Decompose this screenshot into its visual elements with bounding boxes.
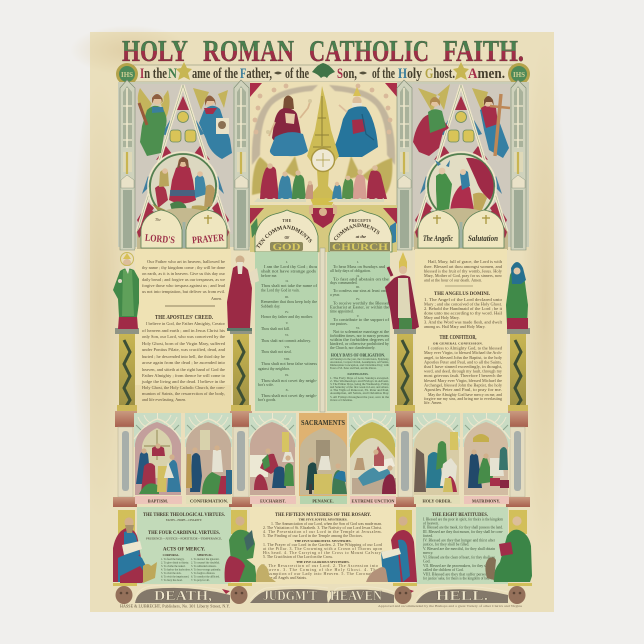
Lord's Prayer text: Our Father who art in heaven, hallowed be: [147, 259, 225, 265]
masks: [116, 586, 526, 604]
creed text: only Son, our Lord, who was conceived by the: [142, 334, 225, 340]
Angelus text: among us. Hail Mary and Holy Mary.: [424, 324, 486, 329]
Hail Mary text: [424, 259, 503, 282]
heading: Salutation: Salutation: [468, 234, 498, 243]
commandments list: VI.: [285, 333, 289, 337]
precepts list: Octave of Christmas.: [330, 399, 353, 402]
precepts list: Ascension, Corpus Christi, Assumption, All Saints,: [330, 361, 389, 364]
Angelus text: 2. Behold the Handmaid of the Lord ; be it: [424, 306, 503, 311]
precepts list: time appointed.: [330, 310, 354, 314]
statue: pope: [385, 252, 419, 329]
precepts list: a year.: [330, 293, 340, 297]
evangelist: St Luke with ox: [366, 510, 417, 582]
Angelus text: 3. And the Word was made flesh, and dwelt: [424, 320, 503, 326]
commandments list: Thou shalt not covet thy neigh-: [261, 379, 318, 383]
mercy lists: 5. To forgive offences.: [191, 572, 216, 575]
beatitudes list: [422, 518, 504, 582]
precepts list: 3. The Ember Days, being the Wednesday, Friday: [330, 383, 390, 386]
band text: [140, 66, 505, 82]
mercy lists: 2. To counsel the doubtful.: [191, 562, 220, 564]
label: death: DEATH,: [154, 589, 212, 604]
precepts list: VI.: [356, 326, 360, 330]
Hail Mary text: blessed is the fruit of thy womb, Jesus. Holy: [424, 268, 503, 274]
beatitudes list: III. Blessed are they that mourn, for they shall be com-: [423, 530, 504, 535]
precepts list: the Church, nor clandestinely.: [330, 346, 375, 351]
commandments list: [258, 260, 318, 402]
mercy lists: 1. To instruct the ignorant.: [191, 558, 220, 561]
precepts list: all holy days of obligation.: [330, 269, 371, 273]
sacraments heading: SACRAMENTS: [301, 418, 345, 427]
panel: Lord's Prayer and Apostles' Creed: [135, 249, 231, 413]
creed text: judge the living and the dead. I believe in the: [141, 379, 225, 384]
gold spiral columns: [115, 328, 530, 411]
heading: Prayer: PRAYER: [192, 233, 225, 246]
beatitudes list: VI. Blessed are the clean of heart, for they shall see: [423, 556, 495, 560]
beatitudes list: God.: [423, 560, 431, 564]
Hail Mary text: thee. Blessed art thou amongst women, and: [424, 264, 502, 270]
arches: Angelus Salutation: [414, 208, 508, 250]
precepts list: Not to solemnize marriage at the: [333, 330, 389, 334]
title: FAITH.: [443, 33, 524, 68]
precepts list: FASTING DAYS.: [348, 373, 369, 376]
commandments list: Thou shalt not steal.: [261, 350, 292, 354]
precepts list: All Sundays in the year, the Circumcision, Epiphany,: [330, 358, 389, 361]
triangle frame: [137, 85, 229, 232]
band text: of the: [285, 66, 309, 82]
precepts list: and Saturday of the first week in Lent, and others.: [330, 386, 389, 389]
sacrament labels: EUCHARIST.: [260, 498, 286, 504]
statue: bishop: [113, 252, 139, 329]
heading: Apostles' Creed: THE APOSTLES' CREED.: [155, 315, 213, 321]
panel: virtues and acts of mercy: SPIRITUAL.: [197, 554, 213, 557]
precepts list: 5. All Fridays throughout the year, save in the: [330, 396, 390, 399]
panel: fifteen mysteries of the rosary: THE FIVE GLORIOUS MYSTERIES.: [296, 560, 350, 564]
panel: fifteen mysteries of the rosary: THE FIVE JOYFUL MYSTERIES.: [299, 518, 348, 522]
Lord's Prayer text: [142, 259, 226, 301]
commandments list: IX.: [285, 373, 289, 377]
evangelist: St Mark with lion: [225, 510, 276, 582]
precepts list: 1. The Forty Days of Lent, Sundays excepted.: [330, 377, 389, 380]
commandments list: II.: [286, 279, 289, 283]
sacrament labels: [135, 496, 509, 504]
beatitudes list: II. Blessed are the meek, for they shall possess the land.: [423, 526, 503, 530]
Confiteor text: I confess to Almighty God, to the blessed: [428, 346, 502, 352]
beatitudes list: for justice' sake, for theirs is the kingdom of heaven.: [423, 576, 495, 582]
Lord's Prayer text: us not into temptation, but deliver us from evil.: [142, 289, 225, 295]
precepts list: To contribute to the support of: [333, 318, 390, 322]
commandments list: Thou shalt not covet thy neigh-: [261, 394, 318, 398]
precepts list: III.: [356, 285, 360, 289]
scene: Eucharist: [249, 413, 296, 495]
commandments list: bor's goods.: [258, 398, 276, 402]
Lord's Prayer text: forgive those who trespass against us ; and lead: [142, 283, 225, 288]
angel with veil: [193, 88, 232, 159]
ground: [254, 198, 384, 202]
beatitudes list: of heaven.: [423, 522, 439, 526]
medallion left: IHS: [121, 71, 133, 79]
panel: fifteen mysteries of the rosary: Assumption of our Lady into Heaven. 5. The Coronation: [263, 572, 378, 576]
heading: mysteries: THE FIFTEEN MYSTERIES OF THE ROSARY.: [275, 513, 371, 518]
scene: Matrimony: [463, 413, 510, 495]
Confiteor text: blessed Mary ever Virgin, blessed Michael the: [424, 378, 502, 384]
band text: Father,: [240, 66, 272, 82]
band text: of the: [372, 66, 395, 82]
title: [122, 33, 524, 68]
commandments list: I am the Lord thy God ; thou: [264, 265, 317, 269]
sacrament labels: HOLY ORDER.: [422, 498, 452, 504]
precepts list: Feast of SS. Peter and Paul, and the Patron.: [330, 367, 377, 370]
evangelist: St Matthew with angel: [113, 510, 157, 583]
beatitudes list: VII. Blessed are the peacemakers, for they shall be: [423, 564, 495, 569]
Confiteor text: Apostles Peter and Paul, to pray for me.: [424, 387, 502, 393]
mercy lists: [161, 558, 221, 582]
heading: theological virtues: THE THREE THEOLOGICAL VIRTUES.: [143, 513, 225, 518]
panel: fifteen mysteries of the rosary: 1. The Resurrection of our Lord. 2. The Ascension into: [263, 564, 378, 568]
mercy lists: 7. To bury the dead.: [161, 579, 183, 582]
panel: fifteen mysteries of the rosary: 2. The Visitation of St. Elizabeth. 3. The Nativity of our Lord Jesus Christ.: [263, 526, 382, 530]
precepts list: Assumption, All Saints, and Christmas Day.: [330, 392, 389, 395]
precepts list: II.: [357, 274, 360, 278]
heading: precepts commandments: COMMANDMENTS: [334, 223, 380, 240]
panel: Precepts of the Church: [327, 210, 392, 411]
gold quatrefoil: [170, 112, 196, 142]
medallion: Annunciation: [426, 152, 496, 222]
panel: Angelus and Confiteor: [415, 249, 507, 413]
heading: the ten commandments: GOD: [272, 243, 301, 253]
creed text: under Pontius Pilate, was crucified, dead, and: [142, 347, 225, 353]
scene: Baptism: [134, 413, 181, 495]
creed text: buried ; he descended into hell, the third day he: [142, 354, 225, 360]
statue: Virgin Mary: [506, 262, 528, 329]
scene: Confirmation: [185, 413, 232, 495]
banner: four last things: [135, 585, 508, 604]
precepts list: 4. The Vigils of Pentecost, SS. Peter and Paul,: [330, 389, 389, 392]
commandments list: before me.: [261, 274, 277, 278]
heading: Angelic: The Angelic: [423, 234, 453, 243]
heading: the ten commandments: OF: [284, 236, 290, 240]
mercy lists: 5. To visit the sick.: [161, 572, 182, 575]
beatitudes list: called the children of God.: [423, 568, 464, 572]
creed text: and life everlasting. Amen.: [142, 397, 186, 402]
commandments list: the Lord thy God in vain.: [261, 288, 300, 292]
Confiteor text: angel, to blessed John the Baptist, to the holy: [424, 355, 503, 361]
commandments list: Thou shalt not bear false witness: [261, 362, 318, 366]
panel: fifteen mysteries of the rosary: 1. The Annunciation of our Lord, when the Son of God was made man.: [271, 522, 382, 527]
mercy lists: 2. To give drink to thirsty.: [161, 562, 189, 564]
sacrament labels: CONFIRMATION.: [190, 498, 228, 504]
Hail Mary text: and at the hour of our death. Amen.: [424, 278, 482, 282]
commandments list: Thou shalt not commit adultery.: [261, 339, 311, 343]
creed text: of heaven and earth ; and in Jesus Christ his: [142, 328, 225, 333]
commandments list: Thou shalt not kill.: [261, 327, 290, 331]
creed text: Father Almighty ; from thence he will come to: [142, 373, 225, 378]
title: ROMAN: [203, 33, 294, 68]
commandments list: X.: [285, 388, 289, 392]
Confiteor text: most grievous fault. Therefore I beseech the: [424, 373, 502, 378]
scene: Extreme Unction: [349, 413, 396, 495]
mercy lists: 6. To visit the imprisoned.: [161, 576, 189, 578]
triangle frame: [415, 85, 507, 232]
Confiteor text: forgive me my sins, and bring me to everlasting: [424, 396, 502, 402]
Angelus text: Mary and Holy Mary.: [424, 315, 460, 320]
heading: cardinal virtues: THE FOUR CARDINAL VIRTUES.: [148, 531, 220, 536]
heading: precepts commandments: CHURCH: [332, 243, 389, 253]
cloud of cherubs: [252, 85, 395, 165]
commandments list: Sabbath day.: [261, 304, 280, 308]
precepts list: within the forbidden degrees of: [330, 338, 390, 342]
panel: left angels triptych: [118, 82, 250, 247]
approbation line: Approved and recommended by the Bishops and a great Variety of other Clerics and Virgins: [378, 604, 523, 608]
band text: Son,: [337, 66, 357, 82]
statue: Moses: [227, 256, 259, 331]
figure: angel above the commandments: [309, 204, 337, 228]
commandments list: VII.: [284, 345, 290, 349]
label: judgment: JUDGM'T: [263, 589, 318, 604]
panel: right angels triptych: [397, 82, 529, 247]
commandments list: against thy neighbor.: [258, 367, 290, 371]
panel: fifteen mysteries of the rosary: above all Angels and Saints.: [263, 576, 307, 580]
central slender pillar: [320, 248, 325, 412]
beatitudes list: justice, for they shall be filled.: [422, 542, 469, 548]
sacrament labels: MATRIMONY.: [472, 498, 500, 504]
mercy lists: 4. To bear wrongs patiently.: [191, 568, 221, 572]
commandments list: IV.: [285, 310, 289, 314]
Lord's Prayer text: daily bread ; and forgive us our trespasses, as we: [142, 277, 225, 283]
creed text: munion of Saints, the resurrection of the body,: [142, 391, 225, 397]
Hail Mary text: Hail, Mary, full of grace, the Lord is with: [428, 259, 502, 265]
evangelist: St John with eagle: [485, 510, 532, 582]
creed text: [141, 321, 226, 402]
panel: virtues and acts of mercy: PRUDENCE—JUSTICE—FORTITUDE—TEMPERANCE.: [146, 536, 222, 540]
God the Father: [332, 87, 378, 157]
beatitudes list: VIII. Blessed are they that suffer persecution: [423, 572, 495, 576]
Hail Mary text: Mary, Mother of God, pray for us sinners, now: [424, 273, 502, 279]
monstrance: [307, 86, 339, 205]
panel: eight beatitudes: [416, 507, 508, 584]
Lord's Prayer text: thy name ; thy kingdom come ; thy will be done: [142, 265, 225, 270]
Confiteor text: word, and deed, through my fault, through my: [424, 368, 503, 374]
Confiteor text: Mary ever Virgin, to blessed Michael the Arch-: [424, 350, 503, 356]
commandments list: shalt not have strange gods: [261, 270, 317, 274]
panel: fifteen mysteries of the rosary: 5. The Crucifixion of Our Lord on the Cross.: [263, 555, 333, 559]
Angelus text: [424, 297, 503, 329]
Christ: [266, 96, 312, 156]
Angelus text: 1. The Angel of the Lord declared unto: [424, 297, 502, 302]
band text: ame of the: [192, 66, 238, 82]
label: heaven: HEAVEN: [330, 589, 382, 604]
panel: Angelus and Confiteor: OR GENERAL CONFESSION.: [433, 342, 483, 346]
panel: fifteen mysteries of the rosary: THE FIVE SORROWFUL MYSTERIES.: [294, 539, 352, 543]
precepts list: forbidden times, nor to marry persons: [330, 334, 390, 339]
Confiteor text: Archangel, blessed John the Baptist, the holy: [424, 382, 503, 388]
heading: Lord's: LORD'S: [144, 233, 176, 246]
mercy lists: 4. To harbor the harborless.: [161, 568, 191, 572]
beatitudes list: forted.: [423, 534, 433, 538]
precepts list: Immaculate Conception, and Christmas Day; with: [330, 364, 390, 367]
creed text: Holy Ghost, born of the Virgin Mary, suffered: [142, 341, 225, 347]
heading: the ten commandments: THE: [282, 219, 292, 223]
mercy lists: 1. To feed the hungry.: [161, 558, 185, 561]
creed text: Holy Ghost, the Holy Catholic Church, the com-: [142, 385, 226, 391]
commandments list: Honor thy father and thy mother.: [261, 315, 313, 319]
sacrament labels: PENANCE.: [312, 498, 334, 504]
title: HOLY: [122, 33, 188, 68]
commandments list: bor's wife.: [258, 383, 274, 387]
panel: virtues and acts of mercy: FAITH—HOPE—CHARITY.: [166, 518, 203, 522]
precepts list: V.: [357, 314, 360, 318]
creed text: I believe in God, the Father Almighty, Creator: [146, 321, 226, 327]
panel: fifteen mysteries of the rosary: 1. The Prayer of our Lord in the Garden. 2. The Whipping of our Lord: [263, 543, 382, 547]
leaf ornaments: [176, 62, 469, 80]
medallion right: [508, 63, 530, 85]
gothic pillars: [120, 80, 526, 250]
heading: Confiteor: THE CONFITEOR,: [440, 334, 477, 341]
precepts list: Eucharist at Easter, or within the: [330, 306, 389, 310]
commandments list: I.: [286, 260, 288, 264]
beatitudes list: mercy.: [423, 551, 433, 555]
panel: fifteen mysteries of the rosary: [250, 507, 396, 584]
sacrament labels: EXTREME UNCTION: [352, 498, 394, 504]
panel: virtues and acts of mercy: [137, 507, 231, 584]
mercy lists: 3. To clothe the naked.: [161, 565, 186, 568]
precepts list: To receive worthily the Blessed: [333, 302, 389, 306]
creed text: arose again from the dead ; he ascended into: [142, 360, 225, 365]
commandments list: VIII.: [284, 357, 290, 361]
band text: Amen.: [468, 66, 505, 82]
panel: fifteen mysteries of the rosary: 4. The Presentation of our Lord in the Temple at Jerusalem.: [263, 530, 382, 534]
scene: Penance: [299, 413, 347, 496]
precepts list: 2. The Wednesdays and Fridays in Advent.: [330, 380, 389, 383]
angel with cross: [472, 88, 510, 158]
medallion: Christ and disciples: [148, 152, 218, 222]
panel: virtues and acts of mercy: CORPORAL.: [163, 554, 180, 557]
panel: fifteen mysteries of the rosary: 5. The Finding of our Lord in the Temple among the Doctors.: [263, 534, 363, 538]
commandments list: III.: [285, 295, 289, 299]
heading: Angelus Domini: THE ANGELUS DOMINI.: [434, 291, 491, 297]
band: sacrament pillars: [113, 411, 530, 507]
beatitudes list: V. Blessed are the merciful, for they shall obtain: [423, 547, 495, 552]
precepts list: To fast and abstain on the: [333, 278, 389, 282]
creed text: heaven, and sitteth at the right hand of God the: [142, 367, 225, 373]
Lord's Prayer text: Amen.: [211, 296, 222, 301]
commandments list: Thou shalt not take the name of: [261, 284, 318, 288]
scene: Holy Orders: [413, 413, 460, 495]
publisher line: HASSE & LUBRECHT, Publishers, No. 301 Liberty Street, N.Y.: [120, 604, 230, 610]
commandments list: V.: [286, 321, 289, 325]
wings: [252, 156, 392, 195]
precepts list: our pastors.: [330, 322, 348, 326]
gold quatrefoil: [448, 112, 474, 142]
heading: precepts commandments: PRECEPTS: [349, 219, 371, 223]
precepts list: I.: [357, 260, 359, 264]
heading: precepts commandments: at the: [356, 234, 366, 239]
sacrament labels: BAPTISM.: [148, 498, 168, 504]
title: CATHOLIC: [309, 33, 429, 68]
Confiteor text: that I have sinned exceedingly, in thought,: [424, 364, 502, 370]
precepts list: IV.: [356, 297, 360, 301]
band text: N: [168, 66, 177, 82]
red corners: [250, 83, 397, 97]
heading: precepts commandments: [330, 219, 390, 253]
Angelus text: done unto me according to thy word. Hail: [424, 310, 503, 316]
angel with lance: [413, 84, 450, 156]
beatitudes list: I. Blessed are the poor in spirit, for theirs is the kingdom: [423, 518, 503, 522]
heading: beatitudes: THE EIGHT BEATITUDES.: [432, 513, 488, 518]
Confiteor text: May the Almighty God have mercy on me, and: [428, 392, 502, 398]
panel: fifteen mysteries of the rosary: at the Pillar. 3. The Crowning with a Crown of Thorns upon: [263, 547, 382, 551]
Confiteor text: [424, 346, 503, 405]
panel: Ten Commandments: [250, 205, 397, 411]
Confiteor text: Apostles Peter and Paul, and to all the Saints,: [424, 360, 502, 366]
precepts list: kindred, or otherwise prohibited by: [330, 342, 389, 347]
arches: Lord's Prayer: [137, 208, 230, 250]
band text: Ghost.: [425, 66, 455, 82]
precepts list: days commanded.: [330, 281, 357, 285]
beatitudes list: IV. Blessed are they that hunger and thirst after: [423, 538, 496, 542]
spandrel colours: [137, 96, 229, 228]
heading: the ten commandments: TEN COMMANDMENTS: [256, 225, 312, 248]
panel: central Holy Trinity: [250, 82, 397, 205]
Confiteor text: life. Amen.: [424, 400, 442, 405]
heading: acts of mercy: ACTS OF MERCY.: [163, 548, 206, 552]
invocation band: [128, 65, 518, 82]
precepts list: To confess our sins at least once: [333, 289, 389, 293]
mercy lists: 6. To comfort the afflicted.: [191, 576, 220, 578]
band text: In the: [140, 66, 167, 82]
adoring angels: [260, 163, 387, 199]
pedestal bars: [113, 583, 532, 586]
medallion right: IHS: [513, 71, 525, 79]
label: hell: HELL.: [436, 589, 488, 604]
Lord's Prayer text: on earth, as it is in heaven. Give us this day our: [142, 271, 226, 277]
mercy lists: 7. To pray for all.: [191, 579, 210, 582]
angel with cross: [138, 88, 170, 156]
precepts list: [330, 260, 390, 402]
medallion left: [116, 63, 138, 85]
precepts list: To hear Mass on Sundays and: [333, 265, 385, 269]
spandrel colours: [415, 96, 507, 228]
holy days heading: HOLY DAYS OF OBLIGATION.: [331, 354, 385, 358]
panel: fifteen mysteries of the rosary: His head. 4. The Carrying of the Cross to Mount Calvary.: [263, 551, 382, 555]
panel: fifteen mysteries of the rosary: Heaven. 3. The Coming of the Holy Ghost. 4. The: [263, 568, 378, 572]
mercy lists: 3. To admonish sinners.: [191, 565, 217, 568]
Angelus text: Mary ; and she conceived of the Holy Ghost.: [424, 302, 502, 306]
arches: Lord's Prayer: The: [155, 217, 161, 222]
commandments list: Remember that thou keep holy the: [261, 300, 317, 304]
band text: Holy: [398, 66, 422, 82]
